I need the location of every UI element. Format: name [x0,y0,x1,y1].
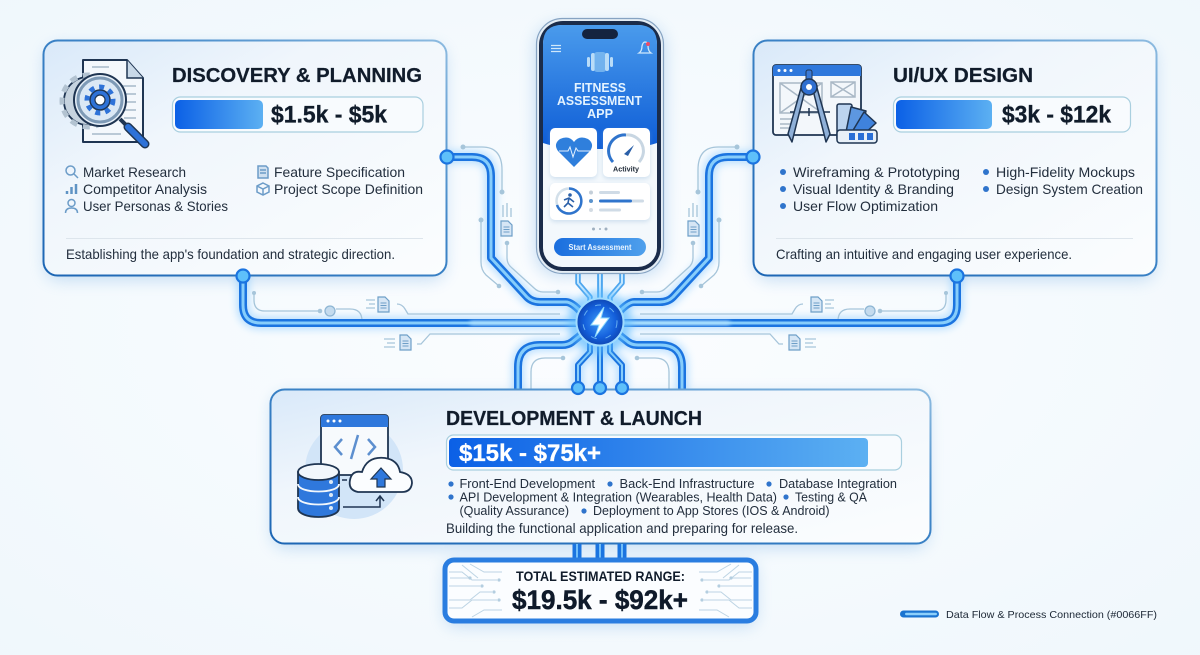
list: design tasks: Wireframing & Prototyping [793,164,960,180]
list: discovery tasks: Project Scope Definition [274,181,423,197]
list: development tasks [460,476,897,518]
list: design tasks: Design System Creation [996,181,1143,197]
description: Establishing the app's foundation and strategic direction. [66,246,395,262]
icon: bell [639,42,651,53]
start button: Start Assessment [568,242,632,252]
list: discovery tasks: Market Research [83,164,186,180]
bullet dots [448,481,789,514]
phone title [557,81,642,121]
panel: discovery and planning [44,40,446,276]
panel: UI/UX design [754,40,1156,276]
phone mockup [536,18,664,274]
panel: development and launch [270,390,930,544]
list: development tasks: Database Integration [779,476,897,491]
price bar: $1.5k - $5k [271,102,388,128]
phone title: ASSESSMENT [557,94,642,108]
list: design tasks: User Flow Optimization [793,198,938,214]
list: development tasks: Deployment to App Stores (IOS & Android) [593,503,830,518]
connector nodes [236,150,964,394]
list: discovery tasks: Feature Specification [274,164,405,180]
icon: code database cloud [298,415,412,519]
list: design tasks: Visual Identity & Branding [793,181,954,197]
price bar [172,97,423,132]
price bar: $3k - $12k [1002,102,1112,128]
list: development tasks: API Development & Integration (Wearables, Health Data) [460,490,777,504]
notch [582,29,618,39]
phone title: FITNESS [574,81,626,95]
card shadows [550,130,650,222]
list icons [66,166,269,213]
total estimated range box [445,560,756,621]
progress card [550,183,650,220]
price bar [894,97,1130,132]
description: Building the functional application and preparing for release. [446,520,798,536]
heart card [550,128,597,177]
connector traces [243,144,957,389]
price bar [446,435,902,470]
activity gauge card [603,128,650,177]
icon: dumbbell [587,52,613,72]
list: discovery tasks: Competitor Analysis [83,181,207,197]
links to total [577,544,622,558]
start button [554,238,646,256]
legend: Data Flow & Process Connection (#0066FF) [946,609,1157,621]
list: design tasks: High-Fidelity Mockups [996,164,1135,180]
total value: $19.5k - $92k+ [512,585,688,615]
list: development tasks: Front-End Development [460,476,595,491]
list: design tasks [793,164,1143,214]
phone title: APP [587,107,613,121]
total label: TOTAL ESTIMATED RANGE: [516,569,685,584]
central hub [568,290,632,354]
list: development tasks: (Quality Assurance) [460,503,569,518]
bullet dots [780,169,989,209]
list: discovery tasks: User Personas & Stories [83,198,228,214]
icon: wireframe compass palette [773,65,877,143]
heading: UI/UX DESIGN [893,65,1033,87]
list: development tasks: Back-End Infrastructure [620,476,754,491]
price bar: $15k - $75k+ [459,440,601,467]
heading: DISCOVERY & PLANNING [172,65,422,87]
icon: gear document magnifier [62,60,145,144]
description: Crafting an intuitive and engaging user experience. [776,246,1072,262]
list: discovery tasks [83,164,423,214]
activity gauge card: Activity [613,164,640,174]
list: development tasks: Testing & QA [795,490,867,504]
heading: DEVELOPMENT & LAUNCH [446,408,702,430]
icon: menu [551,46,561,52]
